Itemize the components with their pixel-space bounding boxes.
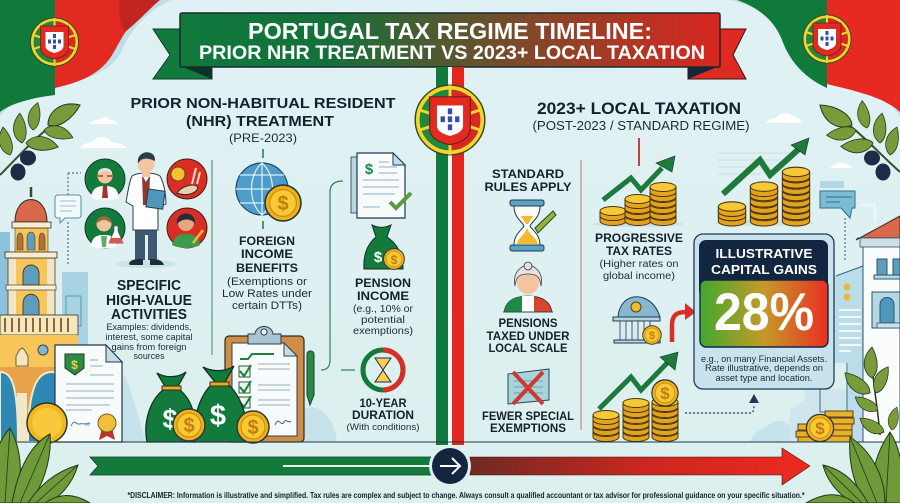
label: standard rules apply: STANDARD <box>492 167 564 181</box>
label: foreign income benefits: FOREIGN <box>239 234 295 248</box>
icon: money bags: $ <box>162 404 178 434</box>
label: specific high-value activities <box>106 278 192 361</box>
icon: coin pile right <box>796 411 854 442</box>
timeline arrow: green <box>90 457 432 475</box>
label: specific high-value activities: interest, some capital <box>106 332 192 342</box>
heading: 2023+ local taxation: (POST-2023 / STANDARD REGIME) <box>532 119 750 133</box>
icon: globe with coin: $ <box>277 193 289 215</box>
chart: lower coin stacks with arrow: $ <box>660 384 670 403</box>
icon: money bags: $ <box>247 417 259 439</box>
olive branch: top left <box>0 97 83 180</box>
icon: certificate <box>55 345 122 442</box>
timeline arrow: red <box>470 448 810 485</box>
label: foreign income benefits: certain DTTs) <box>232 300 302 312</box>
flag: top right <box>730 0 900 116</box>
label: pension income: exemptions) <box>353 325 413 337</box>
label: foreign income benefits: (Exemptions or <box>227 276 307 288</box>
heading: 2023+ local taxation: 2023+ LOCAL TAXATION <box>537 99 741 118</box>
label: pension income: potential <box>361 314 405 326</box>
label: 10-year duration: (With conditions) <box>346 422 420 433</box>
label: pension income: INCOME <box>357 289 409 303</box>
icon: pension document: $ <box>365 161 374 178</box>
timeline marker <box>429 445 471 487</box>
chart: large coin stacks with arrow <box>714 138 814 226</box>
label: foreign income benefits: BENEFITS <box>236 261 298 275</box>
title text: PRIOR NHR TREATMENT VS 2023+ LOCAL TAXATION <box>199 43 705 64</box>
label: pensions taxed: PENSIONS <box>498 316 558 330</box>
icon: money bags <box>146 366 269 443</box>
right buildings <box>790 216 900 442</box>
label: fewer special exemptions: FEWER SPECIAL <box>482 409 574 423</box>
label: specific high-value activities: ACTIVITIES <box>111 307 187 323</box>
label: specific high-value activities: HIGH-VALUE <box>106 293 192 309</box>
central seal <box>415 85 485 155</box>
central divider <box>436 67 464 445</box>
icon: gold coin left <box>27 403 67 443</box>
panel heading <box>711 246 817 277</box>
icon: certificate: $ <box>71 358 78 372</box>
icon: pen <box>307 351 314 405</box>
flag: top left <box>0 0 172 116</box>
panel caption: e.g., on many Financial Assets. <box>701 354 827 364</box>
chart: lower coin stacks with arrow <box>593 352 759 442</box>
label: foreign income benefits: Low Rates under <box>222 288 312 300</box>
arrow: red curved <box>672 303 696 342</box>
icon: pensioner <box>503 262 553 312</box>
label: standard rules apply <box>484 167 572 194</box>
label: standard rules apply: RULES APPLY <box>484 180 572 194</box>
heading: prior NHR: (NHR) TREATMENT <box>186 113 334 130</box>
icon: bank <box>613 297 661 344</box>
panel caption: asset type and location. <box>716 373 812 383</box>
panel heading: ILLUSTRATIVE <box>716 246 813 261</box>
disclaimer: *DISCLAIMER: Information is illustrative and simplified. Tax rules are complex and subject to change. Always consult a qualified accountant or tax advisor for professional guidance on your specific situation.* <box>128 491 805 500</box>
section lines <box>68 138 875 430</box>
label: 10-year duration: DURATION <box>352 408 414 422</box>
label: progressive tax rates: global income) <box>603 270 675 282</box>
icon: chemist <box>85 208 125 248</box>
panel caption: Rate illustrative, depends on <box>705 363 823 373</box>
label: pension income: (e.g., 10% or <box>353 303 413 315</box>
label: 10-year duration: 10-YEAR <box>360 396 407 410</box>
icon: doctor <box>116 152 176 268</box>
label: pensions taxed: LOCAL SCALE <box>488 341 568 355</box>
label: pension income: PENSION <box>355 276 411 290</box>
panel heading: CAPITAL GAINS <box>711 262 817 277</box>
building: left <box>0 187 88 442</box>
label: progressive tax rates: PROGRESSIVE <box>595 231 683 245</box>
label: pensions taxed <box>486 316 570 355</box>
heading: prior NHR <box>130 95 396 145</box>
speech bubble: left <box>55 195 81 223</box>
heading: prior NHR: PRIOR NON-HABITUAL RESIDENT <box>130 95 396 112</box>
label: specific high-value activities: gains from foreign <box>112 342 186 352</box>
plant: bottom left <box>0 428 90 503</box>
label: progressive tax rates <box>595 231 683 282</box>
title banner <box>153 13 746 79</box>
icon: globe with coin <box>236 163 301 221</box>
icon: money bags: $ <box>210 400 226 432</box>
panel: illustrative capital gains <box>694 234 834 389</box>
icon: coin pile right: $ <box>815 419 825 438</box>
people cluster <box>85 152 207 268</box>
icon: clipboard <box>225 326 304 442</box>
icon: artist <box>167 208 207 248</box>
label: specific high-value activities: SPECIFIC <box>117 278 182 294</box>
icon: pension money bag <box>364 225 404 269</box>
title text: PORTUGAL TAX REGIME TIMELINE: <box>248 18 652 44</box>
icon: scientist <box>85 159 125 200</box>
label: foreign income benefits <box>222 234 312 312</box>
icon: crossed-out document <box>508 369 549 404</box>
label: 10-year duration <box>346 396 420 433</box>
label: progressive tax rates: TAX RATES <box>606 244 672 258</box>
icon: 10-year timer <box>363 350 403 390</box>
label: fewer special exemptions: EXEMPTIONS <box>490 421 566 435</box>
clouds <box>80 113 852 168</box>
icon: pension document <box>351 153 411 218</box>
icon: art <box>167 159 207 199</box>
heading: 2023+ local taxation <box>532 99 750 133</box>
heading: prior NHR: (PRE-2023) <box>229 131 297 145</box>
label: foreign income benefits: INCOME <box>241 247 293 261</box>
icon: bank: $ <box>649 330 655 342</box>
label: specific high-value activities: sources <box>134 351 165 361</box>
title text <box>199 18 705 64</box>
label: specific high-value activities: Examples: dividends, <box>106 322 192 332</box>
speech bubble: right <box>820 181 855 218</box>
rate: 28% <box>714 283 814 342</box>
soft hills <box>118 370 800 442</box>
icon: hourglass <box>510 200 556 251</box>
chart: small coin stacks with arrow <box>592 156 684 227</box>
label: fewer special exemptions <box>482 409 574 435</box>
icon: pension money bag: $ <box>391 253 398 267</box>
label: pension income <box>353 276 413 337</box>
icon: money bags: $ <box>183 415 195 437</box>
panel caption <box>701 354 827 383</box>
olive branch: top right <box>815 100 900 180</box>
label: progressive tax rates: (Higher rates on <box>600 258 679 270</box>
label: pensions taxed: TAXED UNDER <box>486 329 570 343</box>
ground line <box>0 441 900 443</box>
icon: pension money bag: $ <box>374 249 383 266</box>
plant: bottom right <box>806 347 900 503</box>
